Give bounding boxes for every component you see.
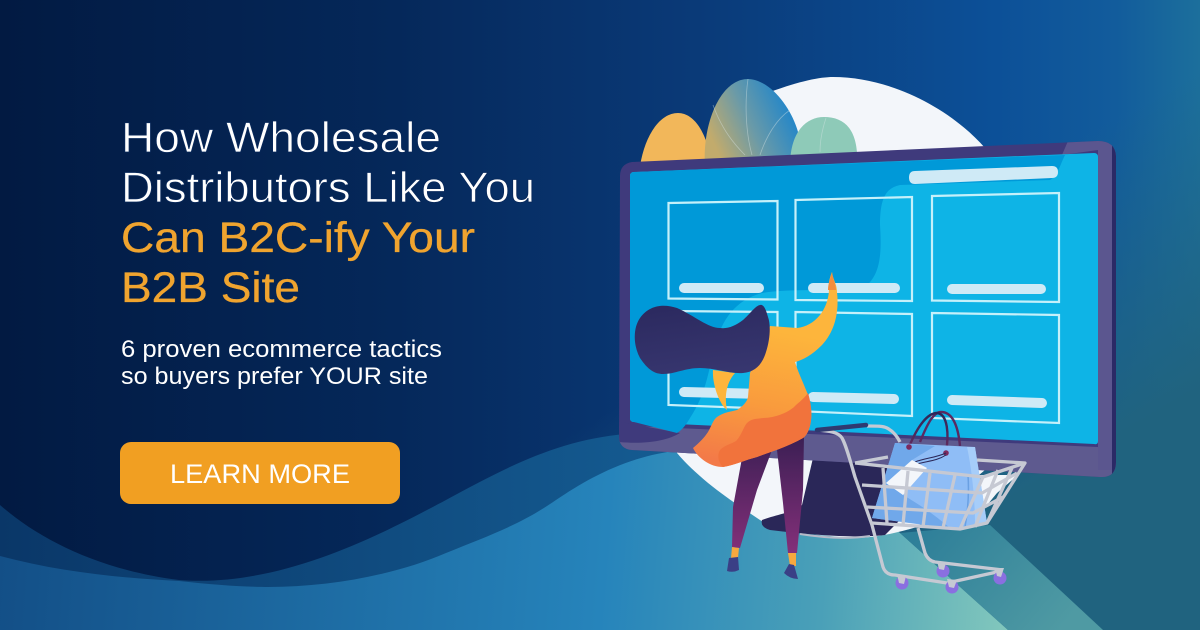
coat shadow fold <box>718 393 811 467</box>
headline highlight <box>121 214 475 312</box>
price tag <box>886 460 927 495</box>
subheading <box>121 336 442 390</box>
shopping bag <box>872 443 987 529</box>
cart handle grip <box>817 425 866 430</box>
monitor lower bezel and right edge <box>610 140 1120 490</box>
bag handles <box>920 412 960 446</box>
white circle behind monitor <box>660 77 1000 538</box>
headline highlight: B2B Site <box>121 264 300 312</box>
cart wire basket <box>817 426 1025 583</box>
monitor stand <box>762 458 900 538</box>
flowing hair <box>635 305 770 374</box>
monitor screen <box>630 153 1098 444</box>
cart wheels <box>896 564 1006 594</box>
cart frame <box>817 430 1003 583</box>
monitor <box>610 140 1120 490</box>
white paper behind bag <box>980 475 1018 510</box>
background waves <box>0 434 1103 630</box>
far arm <box>713 370 735 410</box>
decorative leaves <box>640 79 857 166</box>
woman shopper <box>635 272 838 579</box>
headline: How Wholesale <box>121 114 441 162</box>
headline: Distributors Like You <box>121 164 535 212</box>
coat and raised arm <box>693 272 838 467</box>
learn more button: LEARN MORE <box>170 459 350 489</box>
legs <box>732 436 804 553</box>
darker screen area <box>630 155 1065 433</box>
learn more button <box>120 442 400 504</box>
fingertip <box>828 272 836 290</box>
headline <box>121 114 535 312</box>
monitor frame <box>619 141 1116 477</box>
shopping cart with bag <box>817 412 1025 594</box>
shoes <box>727 557 798 579</box>
subheading: so buyers prefer YOUR site <box>121 363 428 390</box>
headline highlight: Can B2C-ify Your <box>121 214 475 262</box>
product cards <box>668 193 1059 423</box>
top navigation bar <box>909 166 1058 184</box>
ankles <box>731 547 796 566</box>
card label bars <box>684 288 1042 403</box>
subheading: 6 proven ecommerce tactics <box>121 336 442 363</box>
